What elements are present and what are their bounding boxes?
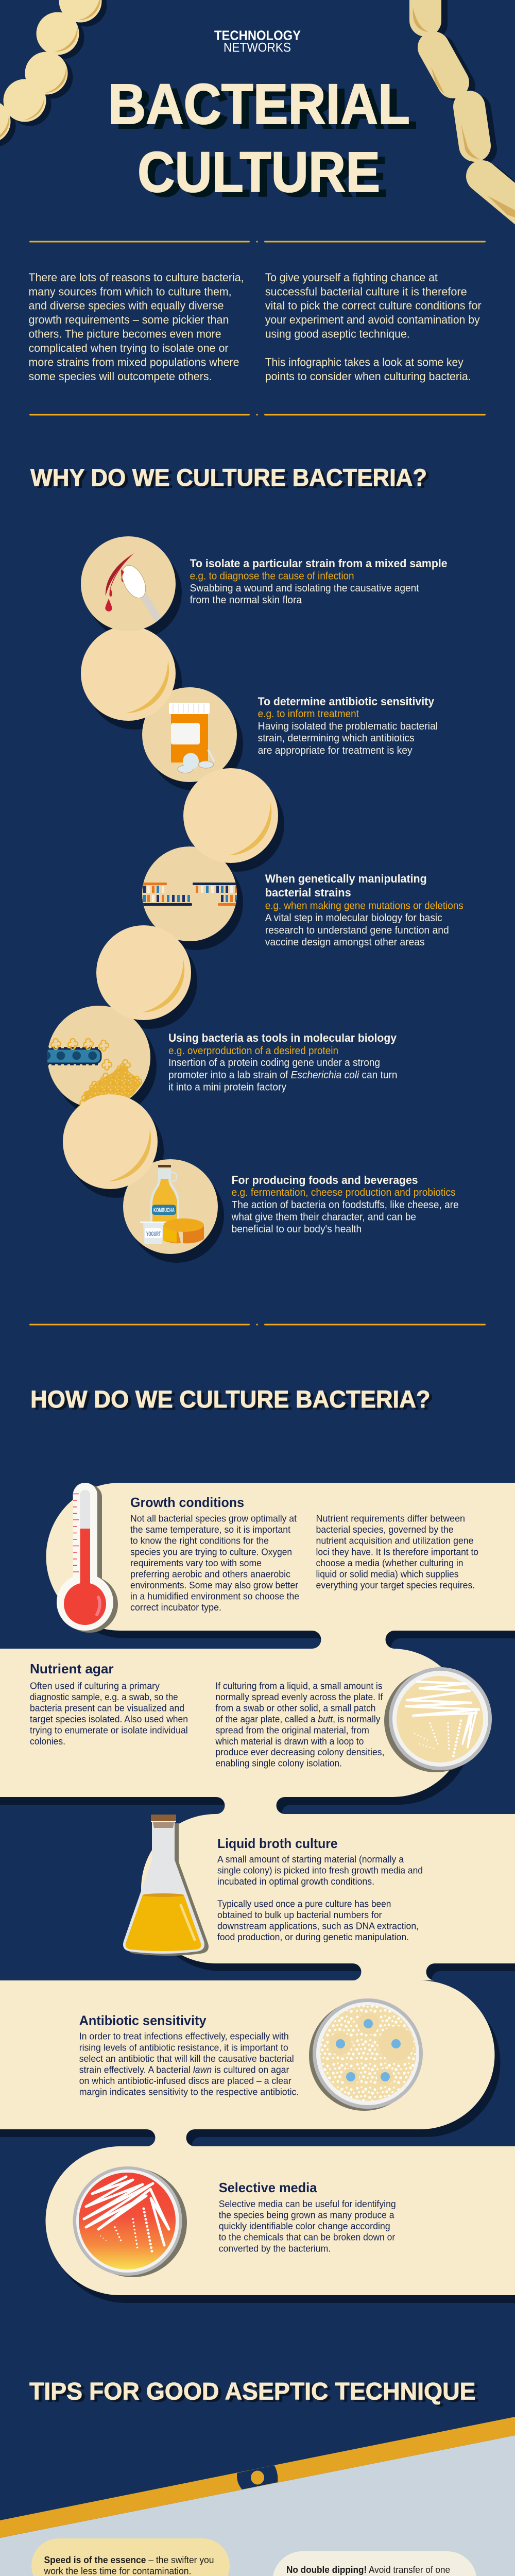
reason 1 text: Swabbing a wound and isolating the causative agent — [190, 583, 419, 594]
intro text: right column: your experiment and avoid contamination by — [265, 313, 480, 326]
growth conditions text: requirements vary too with some — [130, 1557, 262, 1568]
reason 4 text: e.g. overproduction of a desired protein — [168, 1045, 338, 1057]
selective media text: Selective media can be useful for identifying — [219, 2198, 396, 2209]
nutrient agar text: bacteria present can be visualized and — [30, 1702, 184, 1714]
reason 2 text — [258, 695, 438, 756]
reason 5 text: The action of bacteria on foodstuffs, like cheese, are — [232, 1199, 459, 1211]
intro text: right column: using good aseptic technique. — [265, 328, 410, 340]
icon: conical flask — [123, 1815, 209, 1956]
nutrient agar text: If culturing from a liquid, a small amount is — [215, 1681, 382, 1691]
growth conditions text: in a humidified environment so choose the — [130, 1591, 299, 1601]
antibiotic sensitivity text: margin indicates sensitivity to the respective antibiotic. — [79, 2087, 299, 2097]
heading: tips for good aseptic technique: TIPS FOR GOOD ASEPTIC TECHNIQUE — [29, 2377, 476, 2405]
antibiotic sensitivity text: select an antibiotic that will kill the causative bacterial — [79, 2053, 294, 2064]
nutrient agar text: produce ever decreasing colony densities, — [215, 1747, 384, 1757]
icon: fermented foods: YOGURT — [146, 1230, 161, 1238]
liquid broth text: Liquid broth culture — [217, 1836, 338, 1851]
selective media text: converted by the bacterium. — [219, 2243, 331, 2253]
intro text: left column: many sources from which to culture them, — [29, 285, 232, 298]
intro text: left column: There are lots of reasons to culture bacteria, — [29, 271, 244, 284]
nutrient agar text: diagnostic sample, e.g. a swab, so the — [30, 1691, 178, 1702]
bacterial chain of circles — [42, 536, 284, 1263]
growth conditions text: species you are trying to culture. Oxygen — [130, 1546, 292, 1557]
reason 2 text: To determine antibiotic sensitivity — [258, 695, 435, 708]
decoration: cocci chain top left — [0, 0, 107, 147]
intro text: right column: successful bacterial culture it is therefore — [265, 285, 467, 298]
liquid broth text: downstream applications, such as DNA extraction, — [217, 1921, 419, 1931]
reason 3 text — [265, 872, 464, 948]
logo: Technology Networks: TECHNOLOGY — [214, 28, 301, 43]
antibiotic sensitivity text: Antibiotic sensitivity — [79, 2013, 207, 2028]
diagonal band with notch — [0, 2417, 515, 2538]
growth conditions text — [130, 1495, 478, 1613]
reason 1 text — [190, 557, 448, 606]
nutrient agar text: Nutrient agar — [30, 1661, 114, 1676]
nutrient agar text — [30, 1661, 384, 1768]
growth conditions text: the same temperature, so it is important — [130, 1524, 290, 1535]
antibiotic sensitivity text: rising levels of antibiotic resistance, it is important to — [79, 2042, 288, 2053]
divider — [29, 1324, 486, 1326]
nutrient agar text: from a swab or other solid, a small patch — [215, 1702, 375, 1714]
nutrient agar text: enabling single colony isolation. — [215, 1758, 342, 1768]
growth conditions text: preferring aerobic and others anaerobic — [130, 1568, 290, 1580]
divider — [29, 414, 486, 416]
logo: Technology Networks: NETWORKS — [224, 40, 291, 55]
antibiotic sensitivity text: In order to treat infections effectively, especially with — [79, 2031, 289, 2042]
selective media text: quickly identifiable color change according — [219, 2221, 390, 2231]
intro text: left column: complicated when trying to isolate one or — [29, 342, 229, 354]
liquid broth text: A small amount of starting material (normally a — [217, 1854, 404, 1865]
icon: streaked agar plate — [384, 1667, 492, 1772]
liquid broth text: obtained to bulk up bacterial numbers for — [217, 1909, 382, 1920]
intro text: right column: To give yourself a fighting chance at — [265, 271, 438, 284]
nutrient agar text: normally spread evenly across the plate. If — [215, 1691, 383, 1702]
reason 2 text: e.g. to inform treatment — [258, 708, 359, 720]
panel shadow: culture methods ribbon — [0, 1490, 515, 2303]
title — [108, 73, 410, 204]
reason 4 text: Using bacteria as tools in molecular biology — [168, 1031, 397, 1044]
nutrient agar text: target species isolated. Also used when — [30, 1714, 188, 1724]
icon: swabbing a wound — [105, 553, 162, 622]
intro text: right column: This infographic takes a look at some key — [265, 355, 464, 369]
icon: fermented foods — [140, 1165, 204, 1244]
intro text: left column — [29, 271, 244, 383]
growth conditions text: to know the right conditions for the — [130, 1535, 269, 1546]
intro text: left column: and diverse species with equally diverse — [29, 299, 224, 312]
nutrient agar text: colonies. — [30, 1736, 65, 1747]
reason 5 text: beneficial to our body's health — [232, 1224, 362, 1235]
liquid broth text: Typically used once a pure culture has been — [217, 1898, 391, 1909]
reason 4 text: promoter into a lab strain of Escherichia coli can turn — [168, 1070, 398, 1081]
reason 3 text: A vital step in molecular biology for basic — [265, 912, 442, 924]
reason 5 text: e.g. fermentation, cheese production and probiotics — [232, 1187, 456, 1198]
liquid broth text: incubated in optimal growth conditions. — [217, 1876, 374, 1887]
title: CULTURE — [138, 141, 380, 204]
panel: culture methods ribbon — [0, 1483, 515, 2295]
intro text: right column: points to consider when culturing bacteria. — [265, 370, 471, 383]
icon: antibiotic pill bottle — [169, 703, 214, 773]
heading: how do we culture bacteria: HOW DO WE CULTURE BACTERIA? — [30, 1385, 431, 1413]
growth conditions text: everything your target species requires. — [316, 1580, 475, 1590]
antibiotic sensitivity text: on which antibiotic-infused discs are placed – a clear — [79, 2075, 291, 2086]
growth conditions text: Growth conditions — [130, 1495, 244, 1510]
reason 2 text: strain, determining which antibiotics — [258, 733, 415, 744]
growth conditions text: Not all bacterial species grow optimally at — [130, 1513, 297, 1524]
tip: no double dipping — [272, 2551, 477, 2576]
growth conditions text: loci they have. It Is therefore important to — [316, 1546, 478, 1557]
liquid broth text — [217, 1836, 423, 1942]
icon: fermented foods: KOMBUCHA — [153, 1207, 175, 1214]
tip: no double dipping: No double dipping! Avoid transfer of one — [286, 2565, 450, 2575]
intro text: left column: others. The picture becomes even more — [29, 328, 221, 340]
growth conditions text: environments. Some may also grow better — [130, 1580, 298, 1590]
reason 1 text: To isolate a particular strain from a mixed sample — [190, 557, 448, 570]
reason 3 text: When genetically manipulating — [265, 872, 427, 885]
icon: DNA strands — [142, 883, 239, 906]
growth conditions text: nutrient acquisition and utilization gene — [316, 1535, 474, 1546]
intro text: left column: growth requirements – some pickier than — [29, 313, 229, 326]
intro text: left column: some species will outcompete others. — [29, 370, 212, 383]
growth conditions text: bacterial species, governed by the — [316, 1524, 453, 1535]
intro text: left column: more strains from mixed populations where — [29, 355, 239, 369]
reason 5 text: what give them their character, and can be — [231, 1212, 416, 1223]
reason 3 text: vaccine design amongst other areas — [265, 937, 425, 948]
reason 5 text: For producing foods and beverages — [232, 1174, 418, 1187]
tip: speed: work the less time for contamination. — [44, 2566, 192, 2576]
growth conditions text: correct incubator type. — [130, 1602, 221, 1613]
selective media text: Selective media — [219, 2180, 317, 2195]
title: BACTERIAL — [108, 73, 410, 136]
reason 3 text: bacterial strains — [265, 886, 351, 899]
nutrient agar text: of the agar plate, called a butt, is normally — [215, 1714, 381, 1724]
lab background — [0, 2435, 515, 2576]
icon: thermometer — [57, 1483, 118, 1633]
growth conditions text: Nutrient requirements differ between — [316, 1513, 465, 1524]
reason 1 text: from the normal skin flora — [190, 595, 302, 606]
selective media text — [219, 2180, 396, 2253]
intro text: right column — [265, 271, 482, 383]
reason 3 text: e.g. when making gene mutations or deletions — [265, 901, 464, 912]
reason 2 text: Having isolated the problematic bacterial — [258, 721, 438, 732]
tip: speed: Speed is of the essence – the swifter you — [44, 2555, 214, 2565]
reason 2 text: are appropriate for treatment is key — [258, 745, 413, 756]
antibiotic sensitivity text: strain effectively. A bacterial lawn is cultured on agar — [79, 2064, 289, 2075]
divider — [29, 241, 486, 243]
selective media text: to the chemicals that can be broken down or — [219, 2232, 395, 2243]
antibiotic sensitivity text — [79, 2013, 299, 2097]
logo: Technology Networks — [214, 28, 301, 55]
nutrient agar text: spread from the original material, from — [215, 1725, 369, 1735]
growth conditions text: liquid or solid media) which supplies — [316, 1568, 458, 1580]
icon: antibiotic disc plate — [309, 1998, 423, 2111]
reason 4 text: Insertion of a protein coding gene under a strong — [168, 1057, 380, 1069]
reason 4 text: it into a mini protein factory — [168, 1082, 286, 1093]
reason 5 text — [231, 1174, 459, 1235]
selective media text: the species being grown as many produce a — [219, 2210, 394, 2221]
nutrient agar text: trying to enumerate or isolate individual — [30, 1725, 188, 1735]
tip: speed — [31, 2538, 230, 2576]
liquid broth text: food production, or during genetic manipulation. — [217, 1931, 409, 1942]
nutrient agar text: Often used if culturing a primary — [30, 1681, 160, 1691]
icon: protein conveyor — [47, 1038, 142, 1105]
growth conditions text: choose a media (whether culturing in — [316, 1557, 464, 1568]
reason 1 text: e.g. to diagnose the cause of infection — [190, 571, 354, 582]
decoration: rod bacteria chain top right — [413, 0, 515, 217]
icon: selective media plate — [73, 2166, 187, 2277]
intro text: right column: vital to pick the correct culture conditions for — [265, 299, 482, 312]
reason 3 text: research to understand gene function and — [265, 925, 449, 936]
nutrient agar text: which material is drawn with a loop to — [215, 1736, 364, 1747]
reason 4 text — [168, 1031, 398, 1093]
heading: why do we culture bacteria: WHY DO WE CULTURE BACTERIA? — [30, 464, 427, 491]
liquid broth text: single colony) is picked into fresh growth media and — [217, 1865, 423, 1876]
